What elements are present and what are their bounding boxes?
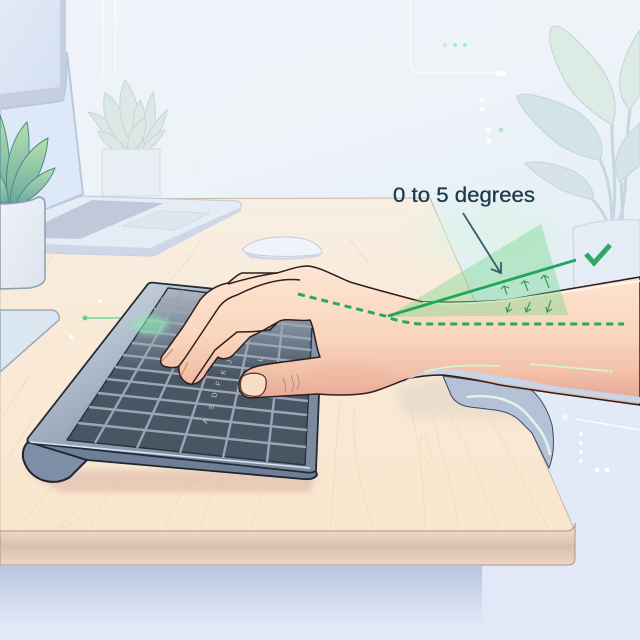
forearm underside band xyxy=(400,369,640,403)
icon: center background plant xyxy=(88,80,167,196)
laptop trackpad xyxy=(122,211,210,230)
hand and forearm xyxy=(161,266,640,405)
degree wedge xyxy=(387,224,568,317)
laptop xyxy=(0,52,241,256)
key letters: A xyxy=(202,418,210,425)
desk top xyxy=(0,198,573,531)
key gaps xyxy=(78,290,312,462)
plant leaves xyxy=(0,115,55,204)
monitor screen xyxy=(0,0,60,95)
icon: left desk plant xyxy=(0,115,55,289)
laptop keyboard xyxy=(44,200,164,239)
finger lines xyxy=(179,273,300,384)
key letters: J xyxy=(226,359,234,365)
wrist rest xyxy=(443,376,553,468)
keyboard key field xyxy=(67,288,313,465)
plant pot xyxy=(102,149,160,196)
small tension arrows xyxy=(501,275,552,312)
forearm green highlights xyxy=(425,364,608,372)
key letters: D xyxy=(211,392,219,399)
key letters: K xyxy=(220,369,228,376)
keyboard front foot xyxy=(23,441,87,482)
desk front edge xyxy=(0,523,575,565)
background circuit lines xyxy=(100,0,543,175)
forearm top highlight xyxy=(423,281,640,304)
palm shading xyxy=(303,364,387,388)
desk wood grain xyxy=(0,240,550,531)
pointer arrow xyxy=(463,213,501,273)
finger nails and creases xyxy=(162,349,299,392)
icon: right background plant xyxy=(517,26,640,225)
key letters: L xyxy=(257,357,265,363)
tablet on desk xyxy=(0,310,59,372)
keyboard shadow xyxy=(24,470,318,492)
keyboard body xyxy=(27,283,325,473)
wrist angle line xyxy=(388,260,576,316)
label: 0 to 5 degrees: 0 to 5 degrees xyxy=(393,184,535,207)
keyboard xyxy=(23,283,325,492)
neutral baseline dashed line xyxy=(298,294,624,324)
monitor bezel xyxy=(0,0,66,109)
laptop base xyxy=(44,196,241,256)
right side green accents xyxy=(562,369,640,472)
monitor xyxy=(0,0,66,109)
forearm shadow on desk xyxy=(395,376,532,420)
green glow accents xyxy=(69,205,560,339)
icon: checkmark xyxy=(586,245,610,263)
icon: mouse xyxy=(242,237,322,260)
key letters: F xyxy=(215,381,223,387)
hand shape xyxy=(161,266,640,405)
keyboard front edge xyxy=(28,442,317,479)
floor shadow under desk xyxy=(0,566,482,626)
plant pot xyxy=(0,197,45,289)
laptop lid xyxy=(0,52,83,215)
plant leaves xyxy=(88,80,167,152)
thumbnail xyxy=(240,373,266,396)
icon: right plant pot xyxy=(573,220,640,300)
key letters xyxy=(202,357,265,425)
keyboard highlight strip xyxy=(30,442,310,468)
key letters: S xyxy=(208,404,216,411)
